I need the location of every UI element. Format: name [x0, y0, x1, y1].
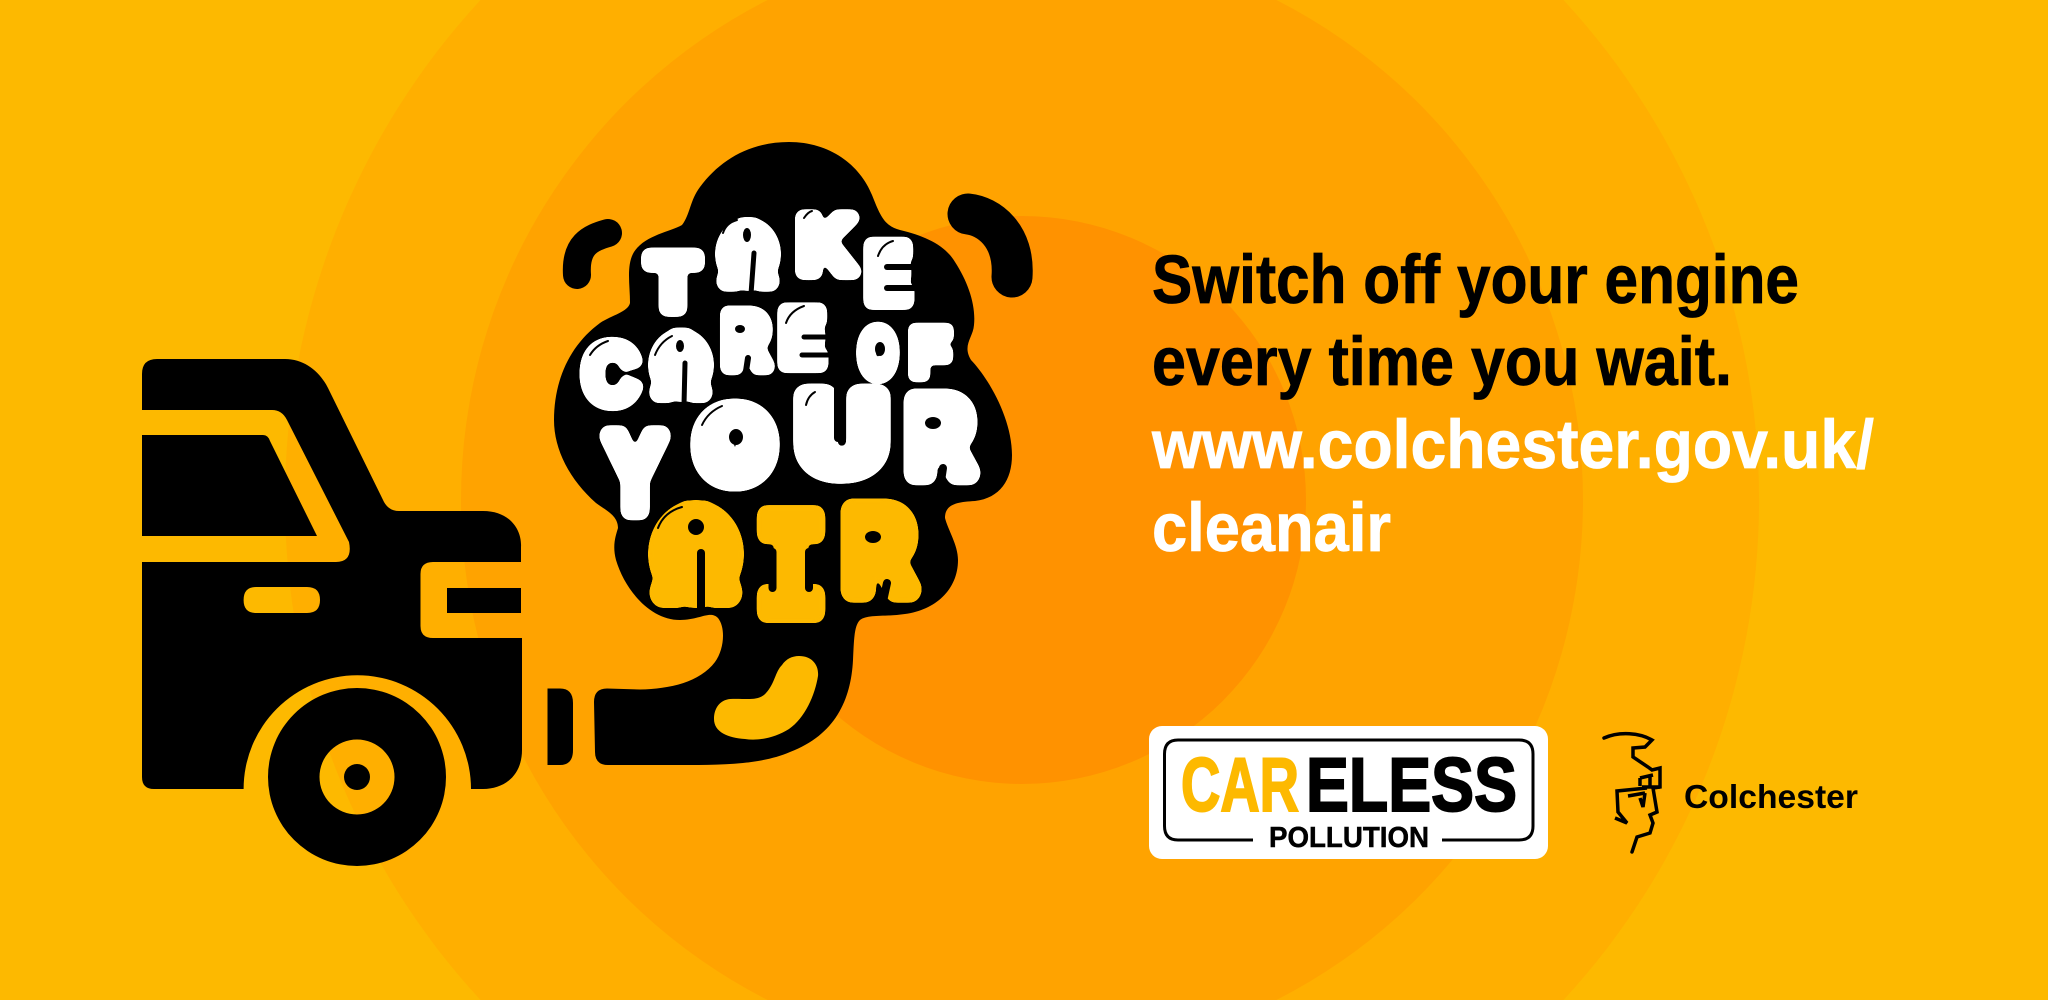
wordmark: Colchester: [1684, 778, 1858, 815]
headline: every time you wait.: [1152, 323, 1732, 400]
letter slits and notches: [684, 253, 943, 610]
word: your: O: [702, 397, 768, 494]
words: care of: C: [584, 328, 638, 420]
website link: www.colchester.gov.uk/: [1151, 406, 1874, 483]
icon: exhaust pipe segment: [548, 688, 573, 765]
word: your: [606, 373, 972, 532]
truck window: [142, 435, 317, 536]
word: your: R: [908, 380, 972, 495]
bubble lettering: take care of your air: [584, 202, 972, 655]
word: air: R: [845, 488, 913, 613]
word: air: A: [661, 493, 731, 617]
words: care of: [584, 295, 950, 420]
icon: helmeted head: [1604, 734, 1660, 852]
logo: colchester council: [1604, 734, 1858, 852]
word: take: [649, 202, 909, 325]
letter highlights: [590, 211, 893, 528]
wheel hub: [344, 764, 370, 790]
word: take: T: [649, 241, 697, 325]
truck headlight: [447, 588, 521, 613]
concentric rings: [285, 0, 1759, 1000]
word: take: A: [724, 213, 772, 298]
words: care of: A: [657, 322, 705, 409]
logo: careless pollution: ELESS: [1306, 743, 1517, 828]
headline: Switch off your engine: [1152, 241, 1799, 318]
word: take: E: [867, 230, 909, 318]
words: care of: E: [781, 295, 823, 380]
icon: truck: [142, 359, 522, 866]
words: care of: O: [861, 319, 895, 388]
word: your: Y: [606, 412, 664, 532]
words: care of: F: [910, 314, 950, 390]
letter counters: [676, 228, 941, 543]
logo: careless pollution: CAR: [1181, 743, 1299, 828]
word: air: [648, 488, 913, 655]
word: your: U: [800, 373, 884, 493]
truck body: [142, 359, 522, 789]
logo: careless pollution: POLLUTION: [1269, 822, 1429, 854]
icon: right smoke puff: [968, 214, 1012, 277]
truck wheel: [268, 688, 446, 866]
icon: smoke cloud tree: [554, 142, 1012, 765]
icon: left smoke puff: [577, 233, 608, 275]
icon: smoke highlight: [714, 656, 818, 740]
word: take: K: [798, 202, 854, 289]
headline: [1152, 241, 1799, 400]
words: care of: R: [723, 298, 769, 382]
logo: careless pollution: [1149, 726, 1548, 859]
website link: [1151, 406, 1874, 566]
website link: cleanair: [1152, 489, 1391, 566]
word: air: I: [757, 491, 825, 655]
